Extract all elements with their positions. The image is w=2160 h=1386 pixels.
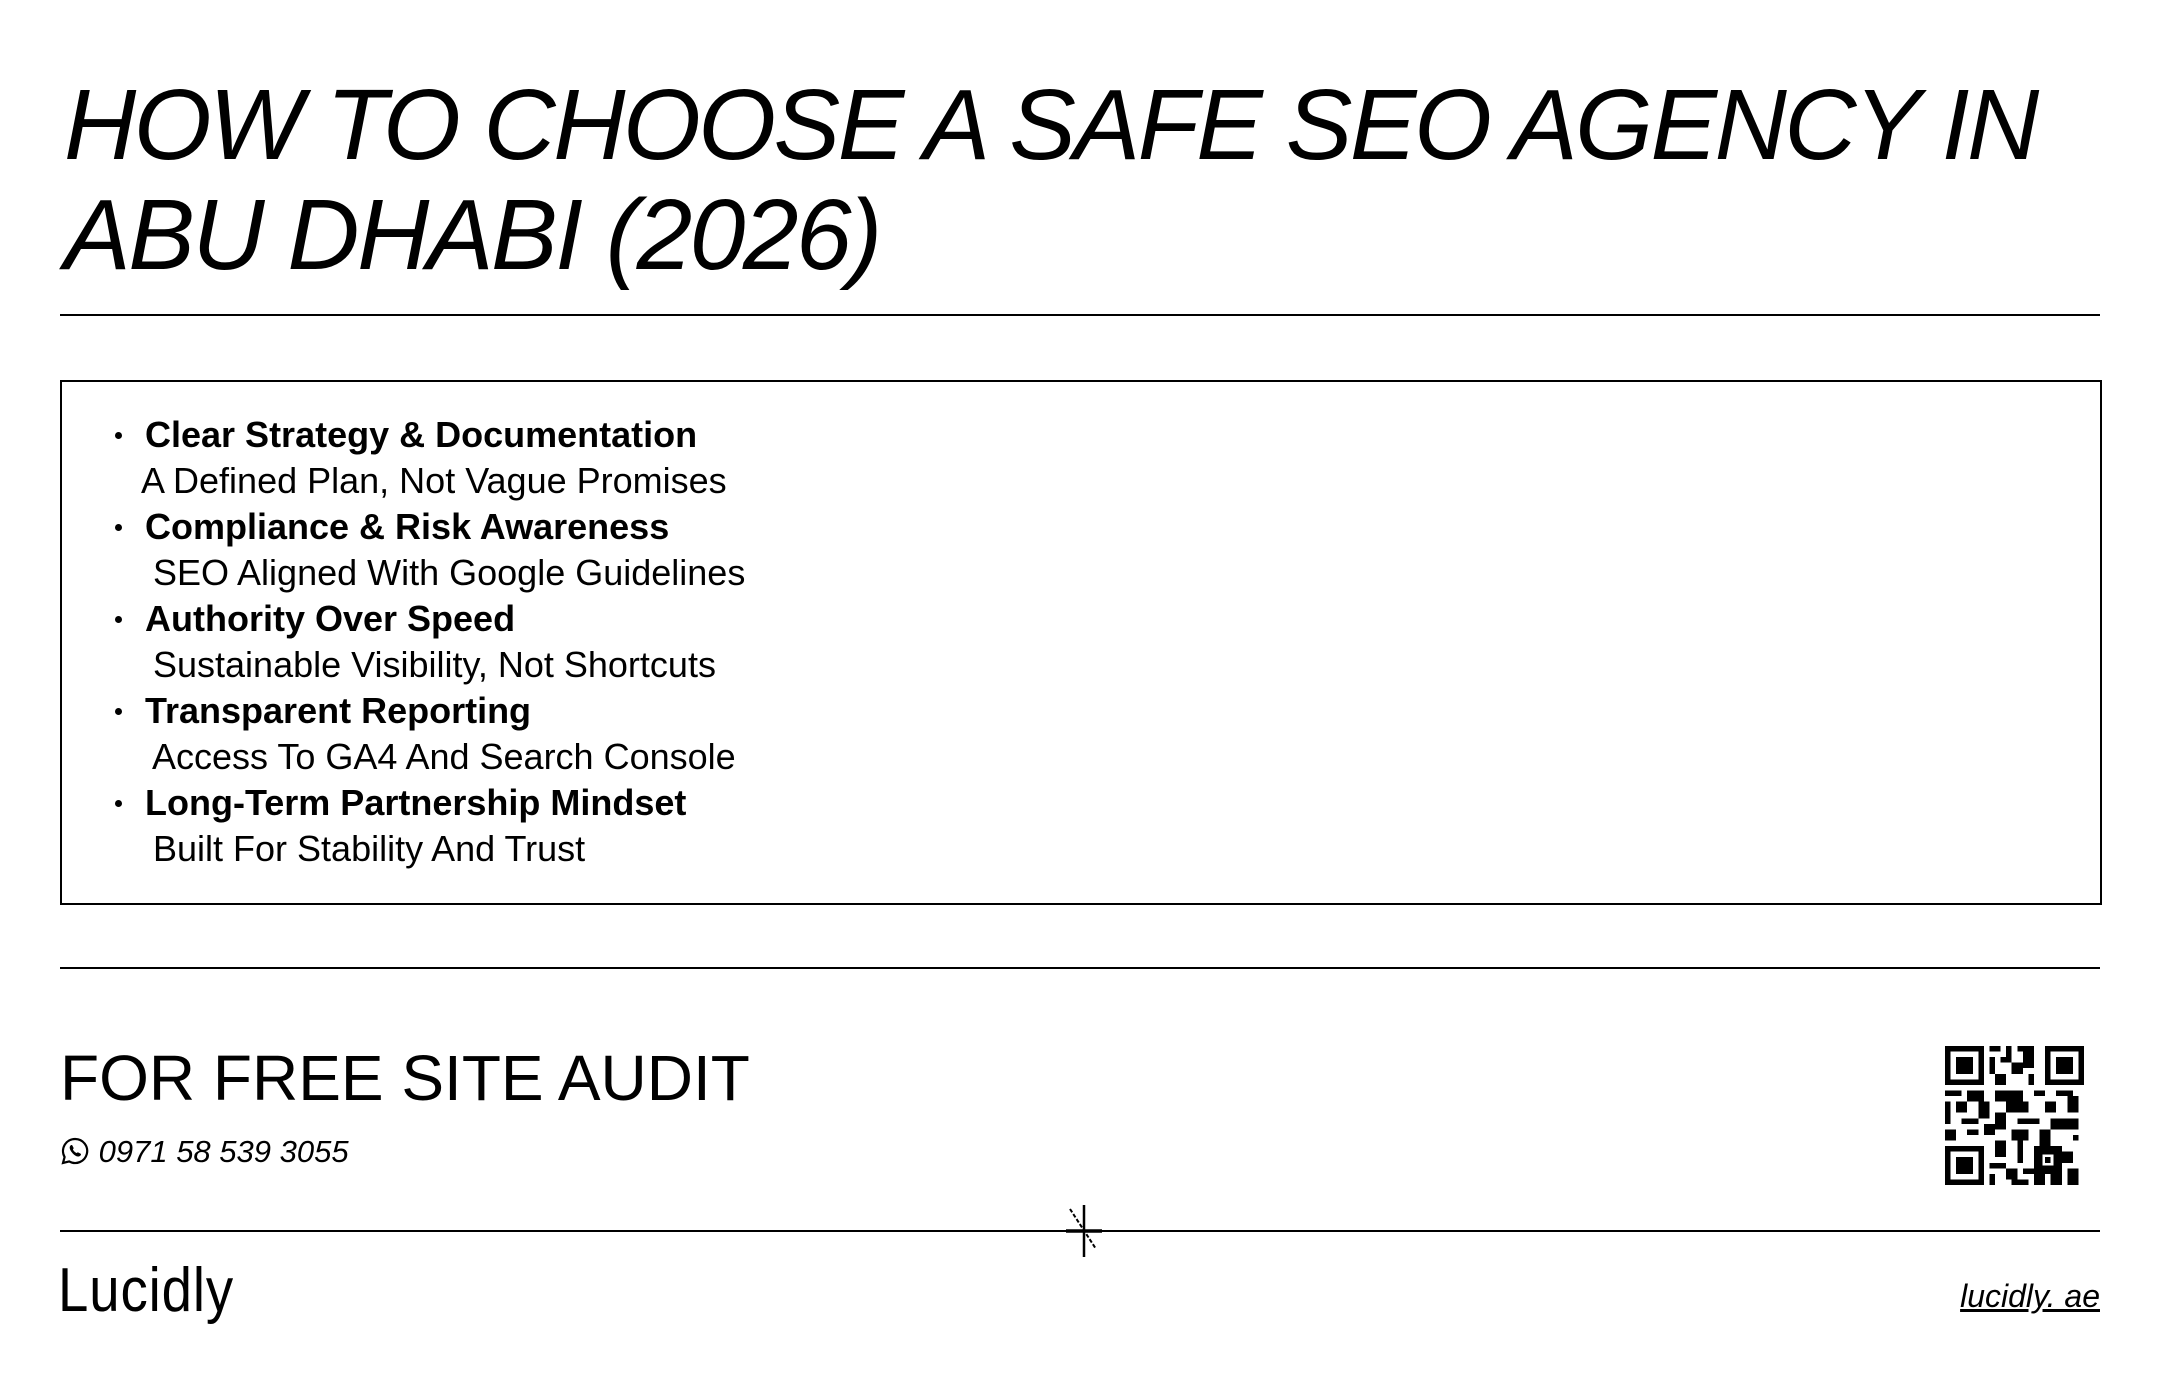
icon: sparkle marker — [1066, 1205, 1102, 1257]
title — [59, 69, 2040, 291]
item 2 — [115, 506, 745, 593]
phone: 0971 58 539 3055 — [99, 1134, 349, 1169]
item 4: Access To GA4 And Search Console — [152, 736, 736, 777]
logo: Lucidly — [58, 1256, 234, 1325]
website link: lucidly. ae — [1960, 1278, 2100, 1314]
cta heading: FOR FREE SITE AUDIT — [60, 1042, 750, 1114]
item 3 — [115, 598, 716, 685]
item 2: Compliance & Risk Awareness — [145, 506, 669, 547]
panel: checklist — [60, 380, 2102, 905]
title: HOW TO CHOOSE A SAFE SEO AGENCY IN — [64, 69, 2037, 181]
item 1: Clear Strategy & Documentation — [145, 414, 697, 455]
qr code — [1945, 1046, 2084, 1185]
item 5: Built For Stability And Trust — [153, 828, 585, 869]
item 5: Long-Term Partnership Mindset — [145, 782, 686, 823]
item 2: SEO Aligned With Google Guidelines — [153, 552, 745, 593]
icon: whatsapp — [62, 1138, 88, 1164]
item 4 — [115, 690, 736, 777]
item 5 — [115, 782, 686, 869]
item 3: Authority Over Speed — [145, 598, 515, 639]
title: ABU DHABI (2026) — [64, 179, 880, 291]
item 1: A Defined Plan, Not Vague Promises — [141, 460, 727, 501]
item 3: Sustainable Visibility, Not Shortcuts — [153, 644, 716, 685]
item 4: Transparent Reporting — [145, 690, 531, 731]
item 1 — [115, 414, 727, 501]
